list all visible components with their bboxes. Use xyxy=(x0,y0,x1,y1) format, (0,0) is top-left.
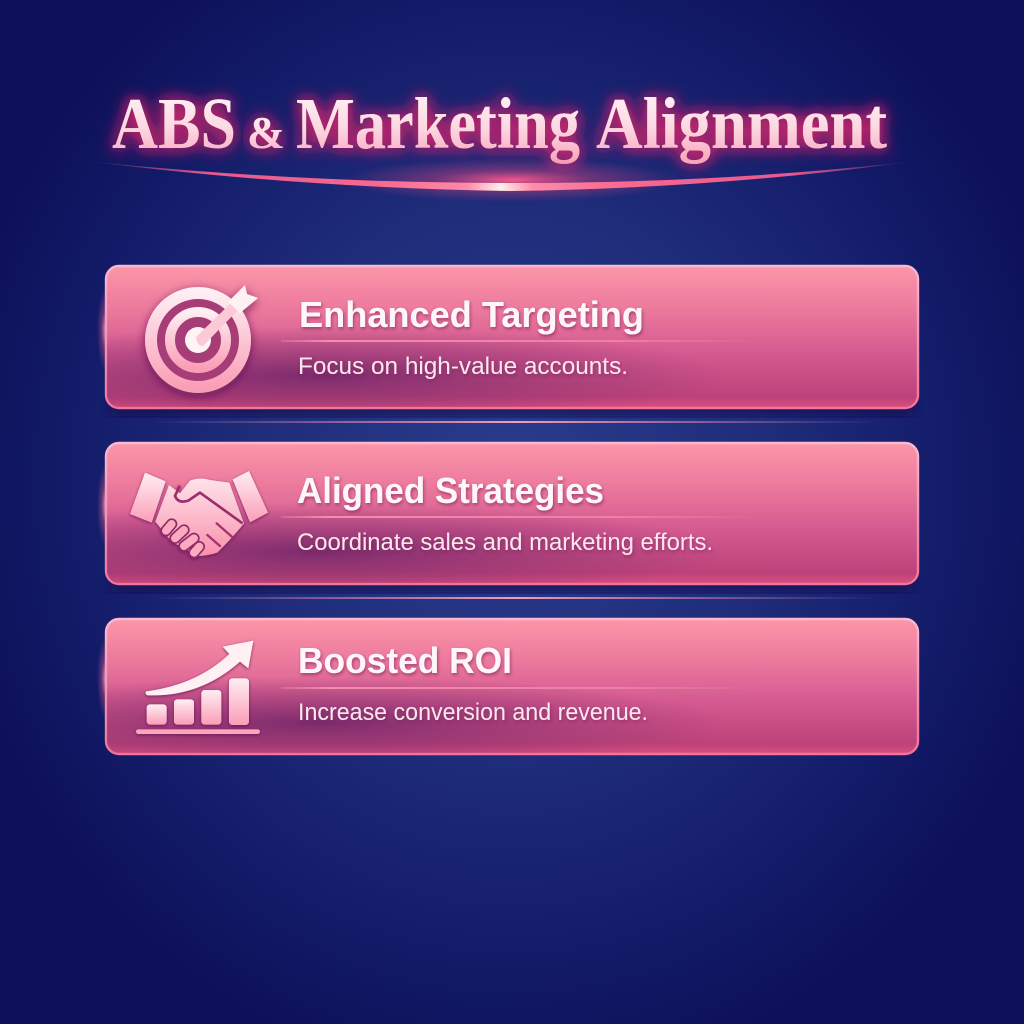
panel: enhanced targeting xyxy=(97,266,918,416)
title: & xyxy=(247,107,285,158)
heading: enhanced targeting: Enhanced Targeting xyxy=(299,294,644,335)
heading: boosted roi: Boosted ROI xyxy=(298,640,512,681)
description: Coordinate sales and marketing efforts. xyxy=(297,529,713,556)
title underline glow arc xyxy=(85,158,916,202)
title: Alignment xyxy=(596,83,887,164)
icon: target with arrow xyxy=(151,285,258,387)
description: Increase conversion and revenue. xyxy=(298,699,648,726)
panel: boosted roi xyxy=(97,619,918,754)
title: Marketing xyxy=(296,83,580,164)
separator lines xyxy=(150,421,880,599)
heading: aligned strategies: Aligned Strategies xyxy=(297,470,604,511)
panel: aligned strategies xyxy=(97,443,918,592)
icon: handshake xyxy=(130,471,268,556)
title: ABS xyxy=(112,83,236,164)
title xyxy=(112,83,887,164)
divider xyxy=(281,687,761,689)
description: Focus on high-value accounts. xyxy=(298,353,628,380)
icon: growth chart with arrow xyxy=(136,641,260,734)
divider xyxy=(281,340,761,342)
divider xyxy=(281,516,761,518)
